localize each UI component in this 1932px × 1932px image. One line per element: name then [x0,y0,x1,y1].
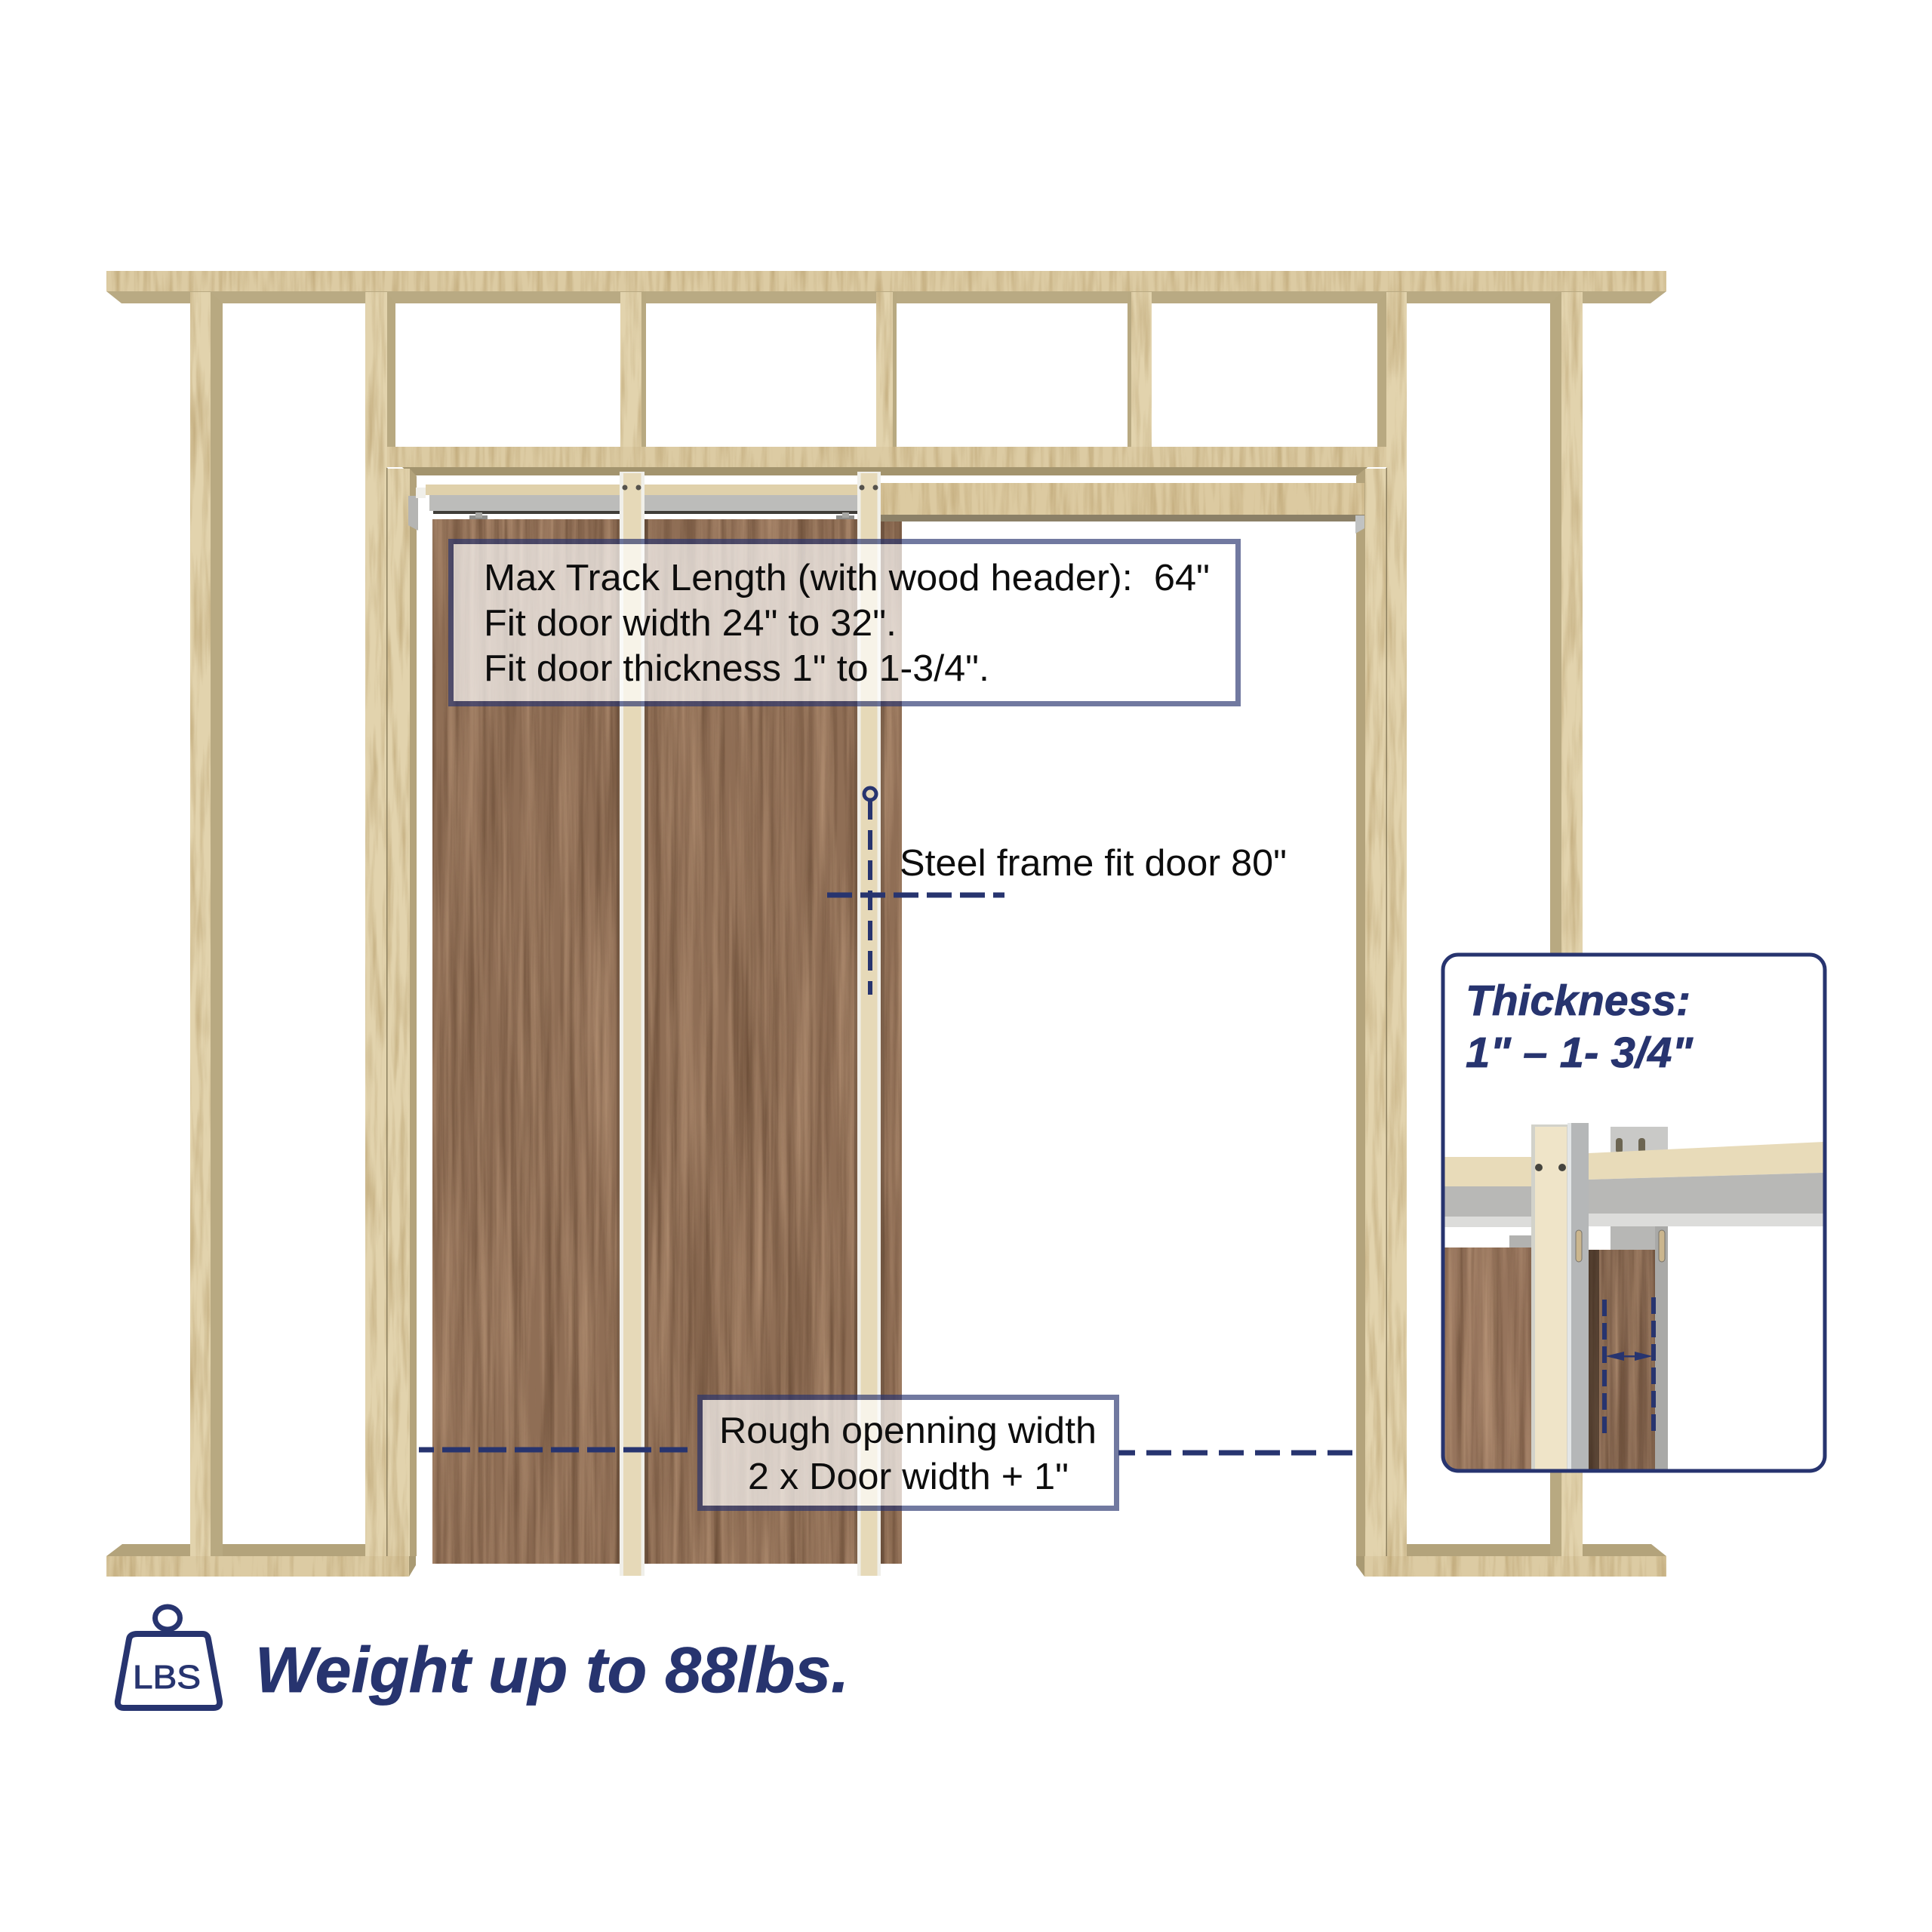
wood header extension [881,483,1364,534]
right outer stud [1550,292,1583,1556]
inset border [1443,955,1825,1471]
inset heading line 1: Thickness: [1466,977,1690,1025]
thickness guide left [1602,1300,1607,1436]
sliding track [408,485,858,531]
callout panel [451,542,1238,703]
timber wall frame [106,271,1666,1577]
cripple stud 3 [1128,292,1152,447]
steel channel [1567,1123,1589,1472]
inset background [1443,955,1825,1471]
top plate [106,271,1666,303]
callout: rough opening [700,1398,1117,1508]
left king stud [365,292,395,1556]
weight label: LBS [133,1659,201,1696]
rough opening title: Rough openning width [719,1411,1097,1451]
right bottom plate [1356,1556,1666,1577]
right jack stud [1356,468,1387,1556]
cripple stud 2 [876,292,897,447]
right door edge [1589,1250,1655,1471]
weight body [118,1634,220,1708]
left outer stud [190,292,223,1556]
callout: track and door limits [451,542,1238,703]
max track length: Max Track Length (with wood header): 64" [484,558,1210,598]
vertical dashed line [868,800,872,995]
inset: door thickness detail [1443,955,1825,1472]
rail shadow [433,511,858,514]
wood post [1531,1124,1567,1472]
rail aluminium left [1444,1186,1531,1227]
bottom plate back faces [106,1544,1666,1556]
rail wood left [1444,1157,1531,1186]
weight ring [155,1607,180,1629]
right king stud [1377,292,1407,1556]
horizontal dashed line [827,892,1004,898]
rough opening panel [700,1398,1117,1508]
dimension: rough opening right line [1118,1451,1352,1455]
rail wood right [1589,1142,1823,1180]
pin circle [864,788,876,800]
left bottom plate [106,1556,416,1577]
thickness guide right [1651,1297,1656,1435]
steel post 1 [620,472,645,1576]
thickness arrow [1605,1352,1653,1361]
cripple stud 1 [620,292,646,447]
roller right [836,512,854,519]
weight capacity statement: Weight up to 88lbs. [255,1635,849,1706]
rail aluminium right [1589,1173,1823,1226]
door width: Fit door width 24" to 32". [484,603,897,644]
door panel [432,519,902,1564]
icon: weight [118,1607,220,1708]
roller left [469,512,488,519]
end stop [416,488,426,498]
inset artwork [1444,1123,1823,1472]
door thickness: Fit door thickness 1" to 1-3/4". [484,648,989,689]
rear bracket [1611,1127,1668,1472]
hardware [1509,1235,1531,1247]
door header [387,447,1386,475]
rough opening formula: 2 x Door width + 1" [748,1457,1069,1497]
aluminium rail [429,495,858,511]
left mounting bracket [408,496,418,531]
left jack stud [386,468,417,1556]
track wood strip [426,485,858,495]
dimension: door height [827,788,1287,995]
steel frame label: Steel frame fit door 80" [900,843,1287,884]
left door [1444,1247,1531,1471]
inset heading line 2: 1" – 1- 3/4" [1466,1029,1694,1077]
steel post 2 [857,472,881,1576]
dimension: rough opening left line [419,1447,688,1452]
